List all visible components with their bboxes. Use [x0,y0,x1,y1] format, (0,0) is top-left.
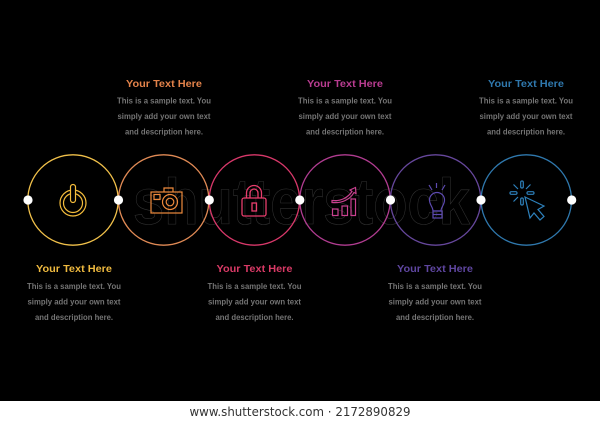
text block 3: and description here. [216,313,294,322]
text block 3: This is a sample text. You [208,282,302,291]
text block 3: simply add your own text [208,298,301,306]
icon: growth chart [332,188,356,216]
text block 2: Your Text Here [126,78,202,90]
text block 2 [117,78,211,136]
text block 6: and description here. [487,128,565,136]
icon: padlock [242,186,266,216]
watermark: shutterstock outline: shutterstock [133,165,471,238]
icon: camera [151,188,182,213]
text block 1: Your Text Here [36,263,112,275]
text block 5: Your Text Here [397,263,473,275]
text block 5: simply add your own text [388,298,482,306]
text block 4: simply add your own text [298,112,392,121]
icon: click cursor [510,181,544,220]
text block 2: and description here. [125,128,203,136]
text block 1 [27,263,121,322]
text block 4: This is a sample text. You [298,96,392,106]
circle 5 purple [390,155,481,245]
text block 6: Your Text Here [488,78,564,90]
icon: power [60,184,86,216]
circle 3 red-pink [209,155,300,245]
text block 6 [479,78,573,136]
connector dots [23,195,576,205]
circle 4 magenta [300,155,390,245]
text block 6: simply add your own text [480,112,573,121]
icon: light bulb [429,183,445,218]
text block 4 [298,78,392,136]
text block 3: Your Text Here [216,263,293,275]
text block 6: This is a sample text. You [479,96,573,106]
text block 2: simply add your own text [118,112,211,121]
circle 2 orange [118,155,209,245]
text block 4: and description here. [306,128,384,136]
text block 5: and description here. [396,313,474,322]
footer: image id: www.shutterstock.com · 2172890829 [190,404,411,419]
circle 6 blue [481,155,572,245]
text block 5 [388,263,482,322]
text block 1: simply add your own text [28,298,121,306]
text block 1: and description here. [35,313,113,322]
text block 5: This is a sample text. You [388,282,482,291]
text block 1: This is a sample text. You [27,282,121,291]
text block 2: This is a sample text. You [117,96,211,106]
circle 1 yellow [28,155,118,245]
text block 4: Your Text Here [307,78,383,90]
text block 3 [208,263,302,322]
